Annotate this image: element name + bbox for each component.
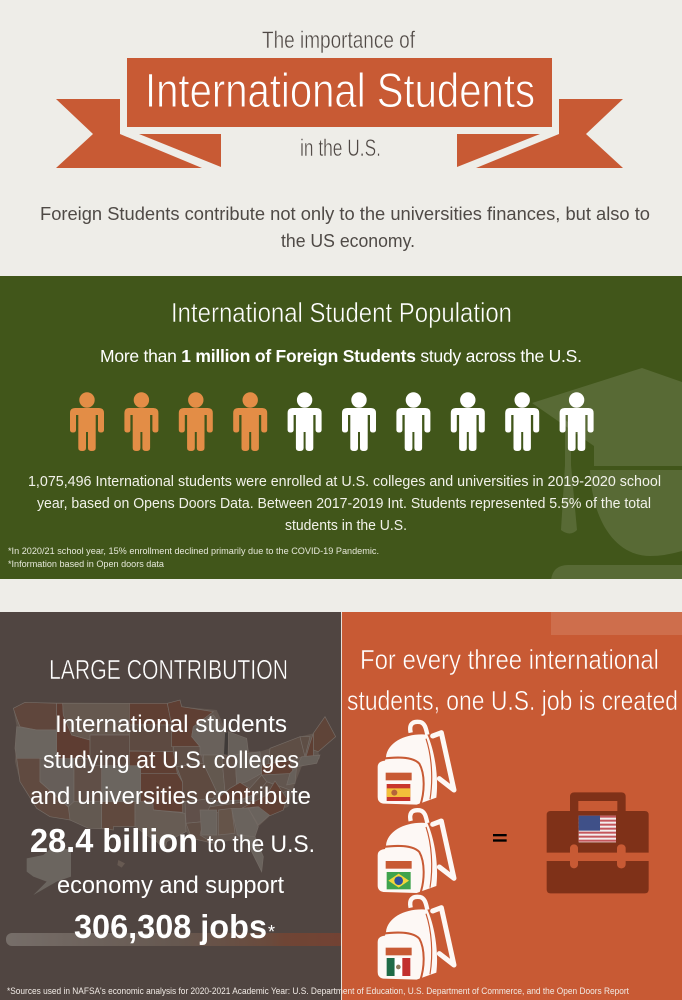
icon: Hawaii <box>117 860 125 868</box>
heading: one job per three students <box>347 644 678 716</box>
intro text: Foreign Students contribute not only to the universities finances, but also to <box>40 204 650 224</box>
ribbon banner with title <box>56 58 623 168</box>
map: United States <box>13 700 336 895</box>
intro text <box>40 204 650 251</box>
text block: contribution statement: 28.4 billion <box>30 822 198 859</box>
heading: population: International Student Population <box>171 297 512 328</box>
text block: contribution statement: 306,308 jobs <box>74 908 267 945</box>
heading: large contribution: LARGE CONTRIBUTION <box>49 654 288 685</box>
subheading: More than 1 million of Foreign Students study across the U.S. <box>100 346 582 366</box>
ribbon tails <box>56 58 623 168</box>
icon: Alaska <box>27 849 71 895</box>
text block: contribution statement: to the U.S. <box>207 831 315 858</box>
pictogram: ten people <box>70 392 594 451</box>
watermark block <box>551 612 682 635</box>
panel: international student population <box>0 276 682 580</box>
text block: contribution statement: economy and support <box>57 872 284 899</box>
panel: jobs created <box>342 612 682 1000</box>
heading: International Students: International Students <box>145 65 535 118</box>
text block: contribution statement: International students <box>55 711 287 738</box>
icon: US flag <box>579 816 616 842</box>
heading: in the U.S.: in the U.S. <box>300 135 381 162</box>
icon: backpack with Spain flag <box>376 722 454 806</box>
icon: equals sign <box>493 834 507 842</box>
intro text: the US economy. <box>281 231 415 251</box>
icon: briefcase <box>547 792 649 893</box>
icon: backpack with Brazil flag <box>376 810 454 894</box>
text block: contribution statement <box>30 711 315 945</box>
text block: contribution statement: * <box>268 922 275 942</box>
icons: backpacks and briefcase <box>376 722 649 981</box>
footnotes: *In 2020/21 school year, 15% enrollment declined primarily due to the COVID-19 Pandemic. <box>8 546 379 557</box>
footnotes <box>8 546 379 570</box>
body text: students in the U.S. <box>285 517 407 534</box>
heading: The importance of: The importance of <box>262 27 415 54</box>
text block: contribution statement: and universities contribute <box>30 783 311 810</box>
progress bar <box>6 933 345 946</box>
body text <box>28 473 661 534</box>
divider between panels <box>341 612 342 1000</box>
text block: contribution statement: studying at U.S. colleges <box>43 747 299 774</box>
panel: large contribution <box>0 612 345 1000</box>
footnotes: *Information based in Open doors data <box>8 559 165 570</box>
icon: backpack with Mexico flag <box>376 897 454 981</box>
body text: year, based on Opens Doors Data. Between 2017-2019 Int. Students represented 5.5% of the total <box>37 495 651 512</box>
icon: graduation cap watermark <box>532 368 682 580</box>
body text: 1,075,496 International students were enrolled at U.S. colleges and universities in 2019-2020 school <box>28 473 661 490</box>
